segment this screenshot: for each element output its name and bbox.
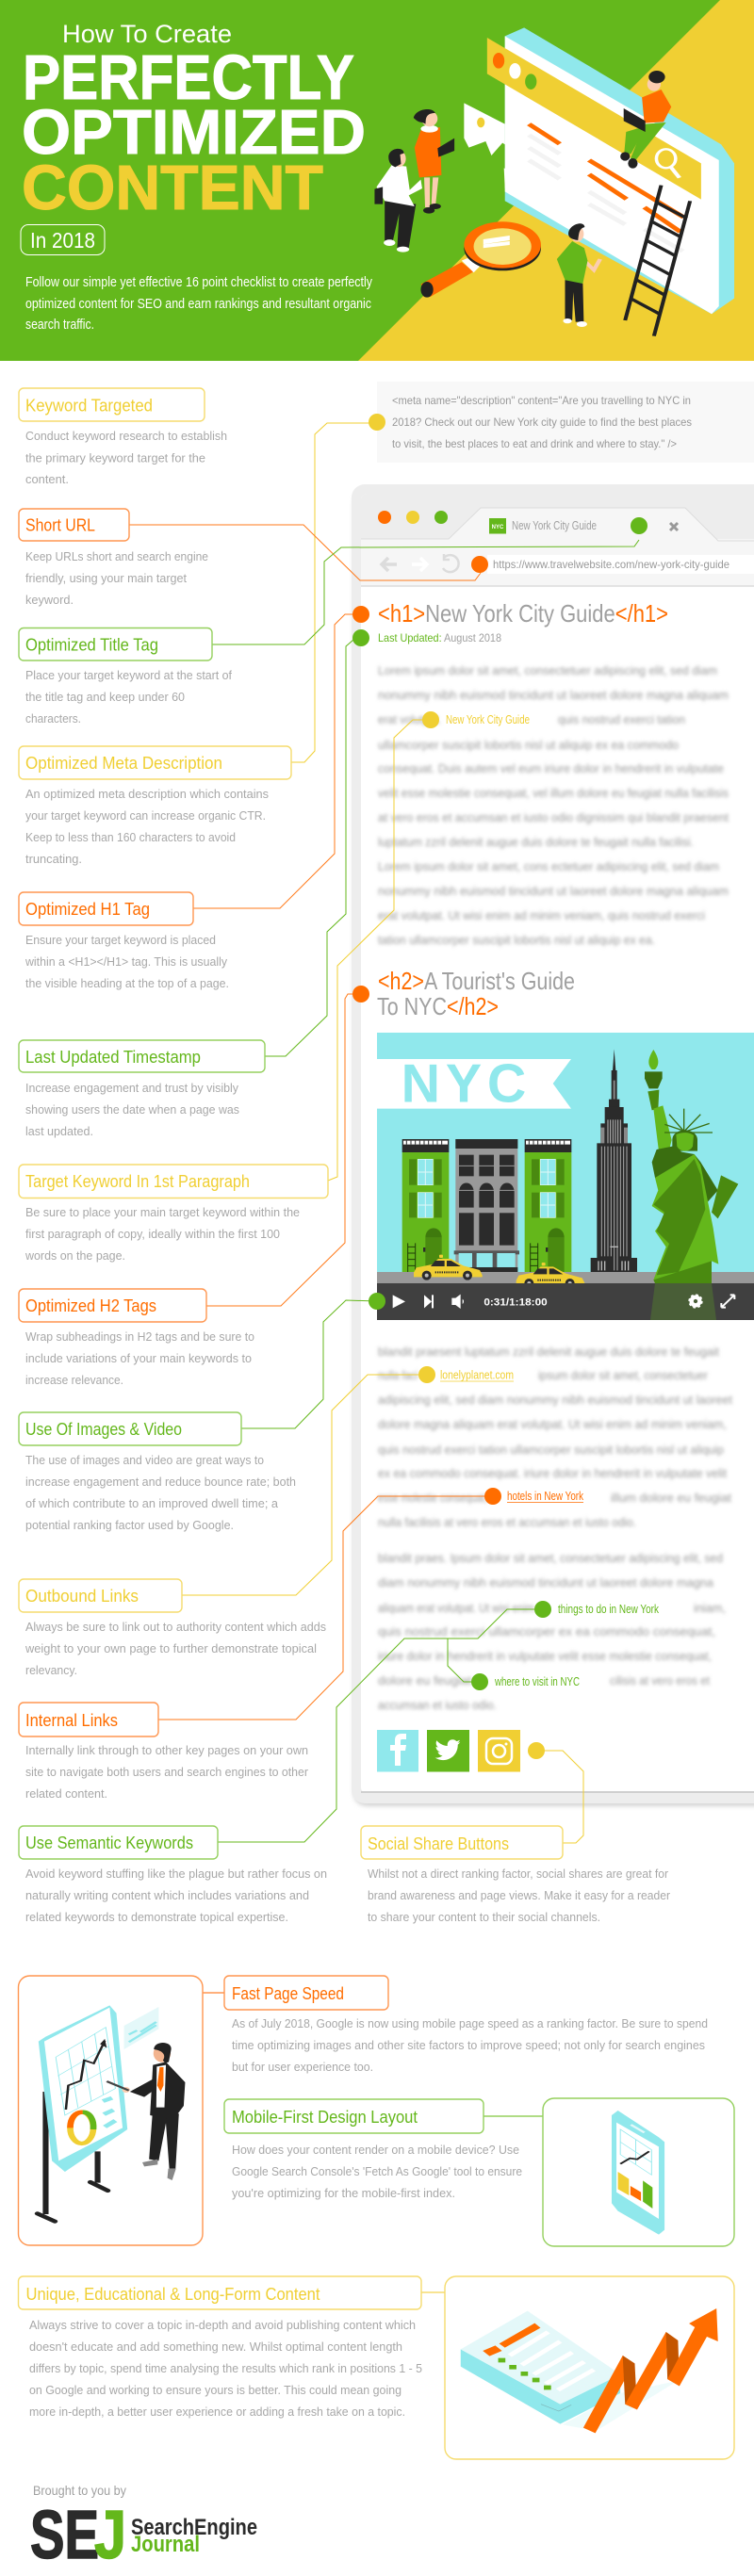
- blurred body paragraph 3: diam nonummy nibh euismod tincidunt ut laoreet dolore magna: [378, 1576, 713, 1590]
- item: Mobile-First Design Layout: Mobile-First Design Layout: [232, 2107, 418, 2127]
- intro paragraph: search traffic.: [25, 318, 94, 333]
- blurred body paragraph 2: adipiscing elit, sed diam nonummy nibh euismod tincidunt ut laoreet: [378, 1394, 733, 1407]
- item: Optimized Meta Description: your target keyword can increase organic CTR.: [25, 808, 266, 823]
- connector: first paragraph keyword: [328, 720, 431, 1181]
- logo: Search Engine Journal: Journal: [131, 2532, 200, 2557]
- blurred body paragraph 1: [378, 664, 729, 947]
- blurred body paragraph 1: erat volutpat.: [378, 713, 441, 726]
- item: Social Share Buttons: [361, 1826, 671, 1924]
- keyword link in first paragraph: New York City Guide: [446, 713, 530, 726]
- panel: page speed illustration: [19, 1976, 224, 2245]
- item: Optimized Title Tag: Place your target keyword at the start of: [25, 668, 232, 682]
- page H1: <h1>New York City Guide</h1>: [378, 599, 668, 628]
- video player: [377, 1033, 754, 1320]
- item: Internal Links: related content.: [25, 1786, 107, 1801]
- blurred body paragraph 1: erat volutpat. Ut wisi enim ad minim veniam, quis nostrud exerci: [378, 909, 705, 922]
- item: Use Of Images & Video: increase engagement and reduce bounce rate; both: [25, 1475, 296, 1489]
- blurred body paragraph 1: luptatum zzril delenit augue duis dolore te feugait nulla facilisi.: [378, 836, 694, 849]
- blurred body paragraph 3: dolore eu feugiat: [378, 1674, 472, 1687]
- icon: twitter: [427, 1730, 469, 1771]
- item: Optimized Meta Description: Keep to less than 160 characters to avoid: [25, 830, 236, 844]
- blurred body paragraph 2: illum dolore eu feugiat: [611, 1492, 732, 1505]
- item: Target Keyword In 1st Paragraph: [19, 1165, 328, 1263]
- presentation board: [38, 2005, 127, 2222]
- blurred body paragraph 1: velit esse molestie consequat, vel illum dolore eu feugiat nulla facilisis: [378, 787, 729, 800]
- blurred body paragraph 1: quis nostrud exerci tation: [558, 713, 685, 726]
- item: Target Keyword In 1st Paragraph: first paragraph of copy, ideally within the first 100: [25, 1227, 280, 1241]
- browser window: [464, 27, 734, 314]
- blurred body paragraph 2: quis nostrud exerci tation ullamcorper suscipit lobortis nisl ut aliquip: [378, 1443, 724, 1457]
- item: Fast Page Speed: but for user experience too.: [232, 2060, 373, 2074]
- person on top with laptop: [620, 71, 671, 169]
- document stack: [461, 2311, 678, 2431]
- page H2: [377, 967, 575, 1020]
- connector: H2 tags: [206, 994, 361, 1306]
- blurred body paragraph 3: aliquam erat volutpat. Ut wisi enim: [378, 1602, 534, 1615]
- taxi right: [516, 1263, 584, 1288]
- heading: How To Create: How To Create: [62, 20, 232, 48]
- panel: example meta description: 2018? Check out our New York city guide to find the best places: [392, 416, 692, 429]
- icon: facebook: [377, 1730, 418, 1771]
- item: Optimized Title Tag: Optimized Title Tag: [25, 635, 158, 654]
- header banner: [0, 0, 754, 361]
- last updated line: Last Updated: August 2018: [378, 631, 501, 644]
- video control bar: [377, 1283, 754, 1320]
- item: Optimized Meta Description: An optimized meta description which contains: [25, 787, 269, 801]
- blurred body paragraph 2: dolore magna aliquam erat volutpat. Ut wisi enim ad minim veniam,: [378, 1418, 727, 1431]
- item: Use Semantic Keywords: naturally writing content which includes variations and: [25, 1888, 309, 1902]
- tab favicon: [489, 518, 506, 533]
- NYC banner: NYC: [402, 1053, 526, 1114]
- tab favicon: NYC: [492, 525, 504, 530]
- page H2: <h2>A Tourist's Guide: [378, 967, 575, 995]
- item: Optimized Meta Description: truncating.: [25, 852, 82, 866]
- item: Optimized Meta Description: Optimized Meta Description: [25, 753, 222, 773]
- item: Social Share Buttons: Social Share Buttons: [368, 1834, 509, 1853]
- item: Mobile-First Design Layout: [224, 2099, 522, 2200]
- item: Use Of Images & Video: of which contribute to an improved dwell time; a: [25, 1496, 279, 1510]
- item: Keyword Targeted: Conduct keyword research to establish: [25, 429, 227, 443]
- item: Short URL: keyword.: [25, 593, 74, 607]
- grey building: [454, 1139, 519, 1272]
- item: Short URL: [19, 509, 208, 607]
- taxi left: [414, 1255, 483, 1280]
- NYC banner: [377, 1053, 571, 1114]
- item: Internal Links: [19, 1703, 309, 1801]
- item: Short URL: friendly, using your main target: [25, 571, 187, 585]
- item: Keyword Targeted: Keyword Targeted: [25, 396, 153, 415]
- intro paragraph: [25, 275, 373, 333]
- blurred body paragraph 1: nonummy nibh euismod tincidunt ut laoreet dolore magna aliquam: [378, 689, 729, 702]
- magnifying glass: [420, 221, 541, 298]
- item: Internal Links: site to navigate both users and search engines to other: [25, 1765, 309, 1779]
- item: Mobile-First Design Layout: you're optimizing for the mobile-first index.: [232, 2186, 455, 2200]
- heading: PERFECTLY: PERFECTLY: [23, 42, 354, 113]
- footer: Brought to you by: Brought to you by: [33, 2483, 126, 2498]
- item: Unique, Educational & Long-Form Content: Always strive to cover a topic in-depth and avoid publishing content which: [29, 2318, 416, 2332]
- internal link: hotels: hotels in New York: [507, 1490, 584, 1503]
- item: Optimized Meta Description: [19, 746, 291, 866]
- blurred body paragraph 3: [378, 1552, 726, 1712]
- road: [377, 1272, 754, 1283]
- item: Fast Page Speed: Fast Page Speed: [232, 1983, 344, 2003]
- item: Keyword Targeted: content.: [25, 472, 69, 486]
- item: Last Updated Timestamp: Increase engagement and trust by visibly: [25, 1081, 238, 1095]
- blurred body paragraph 1: nonummy nibh euismod tincidunt ut laoreet dolore magna aliquam: [378, 885, 729, 898]
- item: Use Of Images & Video: [19, 1412, 296, 1532]
- green townhouse right: [525, 1139, 571, 1272]
- blurred body paragraph 1: Lorem ipsum dolor sit amet, cons ectetuer adipiscing elit, sed diam: [378, 860, 719, 873]
- blurred body paragraph 3: quis nostrud exerci ullamcorper ex ea commodo consequat,: [378, 1625, 715, 1639]
- item: Target Keyword In 1st Paragraph: Be sure to place your main target keyword within the: [25, 1205, 300, 1219]
- item: Optimized H1 Tag: within a <H1></H1> tag. This is usually: [25, 954, 227, 969]
- blurred body paragraph 3: accumsan et iusto odio.: [378, 1699, 497, 1712]
- man with folder: [374, 149, 422, 253]
- item: Optimized Title Tag: the title tag and keep under 60: [25, 690, 185, 704]
- item: Outbound Links: Outbound Links: [25, 1586, 139, 1606]
- illustration: isometric browser with people: [374, 27, 734, 336]
- address bar: https://www.travelwebsite.com/new-york-city-guide: [493, 558, 729, 571]
- panel: example meta description: <meta name="description" content="Are you travelling to NYC in: [392, 394, 691, 407]
- item: Outbound Links: [19, 1579, 326, 1677]
- blurred body paragraph 1: Lorem ipsum dolor sit amet, consectetuer adipiscing elit, sed diam: [378, 664, 717, 677]
- logo: Search Engine Journal: [30, 2498, 257, 2573]
- ladder: [625, 186, 690, 336]
- blurred body paragraph 2: ipsum dolor sit amet, consectetuer: [538, 1369, 708, 1382]
- blurred body paragraph 1: ullamcorper suscipit lobortis nisl ut aliquip ex ea commodo: [378, 739, 679, 752]
- connector: images and video: [241, 1300, 377, 1428]
- item: Unique, Educational & Long-Form Content: differs by topic, spend time analysing the results which rank in positions 1 - 5: [29, 2361, 422, 2375]
- tab title: New York City Guide: [512, 519, 597, 532]
- page H2: To NYC</h2>: [377, 992, 499, 1020]
- item: Target Keyword In 1st Paragraph: Target Keyword In 1st Paragraph: [25, 1171, 250, 1191]
- Statue of Liberty: [645, 1050, 738, 1283]
- connector: short URL: [129, 525, 481, 580]
- address bar: [487, 555, 754, 574]
- logo: Search Engine Journal: SearchEngine: [131, 2515, 257, 2540]
- panel: example meta description: [377, 382, 754, 463]
- blurred body paragraph 3: blandit praes. Ipsum dolor sit amet, consectetuer adipiscing elit, sed: [378, 1552, 723, 1565]
- item: Use Semantic Keywords: [19, 1826, 327, 1924]
- item: Last Updated Timestamp: showing users the date when a page was: [25, 1102, 239, 1117]
- phone: [612, 2111, 664, 2235]
- green townhouse left: [402, 1139, 449, 1272]
- item: Use Of Images & Video: potential ranking factor used by Google.: [25, 1518, 234, 1532]
- semantic keyword: where to visit: where to visit in NYC: [494, 1675, 580, 1688]
- item: Use Semantic Keywords: Avoid keyword stuffing like the plague but rather focus on: [25, 1867, 327, 1881]
- item: Optimized Title Tag: characters.: [25, 711, 81, 726]
- blurred body paragraph 3: cilisis at vero eros et: [610, 1674, 710, 1687]
- badge: In 2018: In 2018: [30, 228, 95, 253]
- item: Outbound Links: weight to your own page to further demonstrate topical: [25, 1641, 317, 1655]
- small card: [124, 2007, 158, 2049]
- item: Last Updated Timestamp: [19, 1040, 265, 1138]
- rising arrow: [583, 2308, 718, 2433]
- item: Unique, Educational & Long-Form Content: on Google and working to ensure yours is better. This could mean going: [29, 2383, 402, 2397]
- semantic keyword: things to do: things to do in New York: [558, 1603, 660, 1616]
- item: Use Semantic Keywords: related keywords to demonstrate topical expertise.: [25, 1910, 288, 1924]
- panel: browser mockup: [352, 484, 754, 1806]
- item: Optimized H1 Tag: [19, 892, 229, 990]
- navigation icons: [382, 554, 459, 572]
- blurred body paragraph 1: tation ullamcorper suscipit lobortis nisl ut aliquip ex ea.: [378, 934, 655, 947]
- connector lines: [129, 423, 639, 1843]
- item: Mobile-First Design Layout: Google Search Console's 'Fetch As Google' tool to ensure: [232, 2164, 522, 2178]
- panel: mobile illustration: [484, 2098, 734, 2246]
- item: Fast Page Speed: As of July 2018, Google is now using mobile page speed as a ranking factor. Be sure to spend: [232, 2016, 708, 2030]
- item: Fast Page Speed: [224, 1976, 708, 2074]
- item: Internal Links: Internally link through to other key pages on your own: [25, 1743, 308, 1757]
- connector: meta description: [291, 423, 369, 762]
- blurred body paragraph 3: iniam,: [694, 1602, 726, 1615]
- tab close: [670, 523, 678, 530]
- woman with tablet: [414, 109, 454, 214]
- connector: last updated: [265, 638, 361, 1056]
- item: Last Updated Timestamp: last updated.: [25, 1124, 93, 1138]
- item: Unique, Educational & Long-Form Content: more in-depth, a better user experience or adding a fresh take on a topic.: [29, 2405, 405, 2419]
- connector: social share: [536, 1751, 583, 1843]
- heading: OPTIMIZED: OPTIMIZED: [22, 97, 366, 168]
- item: Unique, Educational & Long-Form Content: Unique, Educational & Long-Form Content: [26, 2284, 320, 2304]
- item: Social Share Buttons: Whilst not a direct ranking factor, social shares are great for: [368, 1867, 669, 1881]
- logo: Search Engine Journal: SE: [30, 2498, 99, 2573]
- item: Use Of Images & Video: Use Of Images & Video: [25, 1419, 182, 1439]
- blurred body paragraph 2: ex ea commodo consequat. iriure dolor in hendrerit in vulputate velit: [378, 1467, 728, 1480]
- item: Use Of Images & Video: The use of images and video are great ways to: [25, 1453, 264, 1467]
- blurred body paragraph 2: esse molestie consequat,: [378, 1492, 487, 1505]
- item: Optimized H2 Tags: include variations of your main keywords to: [25, 1351, 252, 1365]
- item: Optimized H1 Tag: Ensure your target keyword is placed: [25, 933, 216, 947]
- item: Keyword Targeted: the primary keyword target for the: [25, 450, 205, 465]
- person in green shirt: [557, 223, 600, 327]
- heading: CONTENT: CONTENT: [22, 153, 323, 223]
- item: Optimized H1 Tag: the visible heading at the top of a page.: [25, 976, 229, 990]
- item: Internal Links: Internal Links: [25, 1710, 118, 1730]
- connector: H1 tag: [193, 614, 361, 908]
- logo: Search Engine Journal: J: [94, 2498, 126, 2573]
- blurred body paragraph 1: consequat. Duis autem vel eum iriure dolor in hendrerit in vulputate: [378, 762, 724, 775]
- item: Social Share Buttons: to share your content to their social channels.: [368, 1910, 600, 1924]
- item: Target Keyword In 1st Paragraph: words on the page.: [25, 1248, 125, 1263]
- connector: internal links: [158, 1496, 493, 1720]
- blurred body paragraph 1: at vero eros et accumsan et iusto odio dignissim qui blandit praesent: [378, 811, 729, 824]
- item: Unique, Educational & Long-Form Content: doesn't educate and add something new. Whilst optimal content length: [29, 2340, 402, 2354]
- connector: title tag: [212, 540, 639, 644]
- item: Keyword Targeted: [19, 388, 227, 486]
- item: Mobile-First Design Layout: How does your content render on a mobile device? Use: [232, 2143, 519, 2157]
- item: Short URL: Short URL: [25, 514, 95, 535]
- browser tab bar: [361, 494, 754, 586]
- connector: semantic keywords branch: [448, 1639, 480, 1682]
- icon: instagram: [478, 1730, 520, 1771]
- item: Last Updated Timestamp: Last Updated Timestamp: [25, 1047, 201, 1067]
- item: Social Share Buttons: brand awareness and page views. Make it easy for a reader: [368, 1888, 671, 1902]
- presenter: [107, 2043, 185, 2180]
- connector: semantic keywords: [218, 1609, 543, 1842]
- blurred body paragraph 2: nulla faci: [378, 1369, 418, 1382]
- video control bar: 0:31/1:18:00: [484, 1296, 548, 1308]
- blurred body paragraph 2: nulla facilisis at vero eros et accumsan et iusto odio.: [378, 1516, 636, 1529]
- item: Optimized H2 Tags: increase relevance.: [25, 1373, 123, 1387]
- item: Unique, Educational & Long-Form Content: [19, 2276, 422, 2419]
- panel: long-form content illustration: [421, 2276, 734, 2459]
- item: Optimized H2 Tags: [19, 1289, 254, 1387]
- item: Short URL: Keep URLs short and search engine: [25, 549, 208, 563]
- blurred body paragraph 2: [378, 1345, 733, 1529]
- item: Optimized H2 Tags: Optimized H2 Tags: [25, 1296, 156, 1315]
- connector: outbound links: [182, 1375, 427, 1595]
- blurred body paragraph 3: iriure dolor in hendrerit in vulputate velit esse molestie consequat,: [378, 1650, 712, 1663]
- item: Optimized H2 Tags: Wrap subheadings in H2 tags and be sure to: [25, 1329, 254, 1344]
- item: Use Semantic Keywords: Use Semantic Keywords: [25, 1833, 193, 1852]
- blurred body paragraph 2: blandit praesent luptatum zzril delenit augue duis dolore te feugait: [378, 1345, 720, 1359]
- intro paragraph: Follow our simple yet effective 16 point checklist to create perfectly: [25, 275, 373, 290]
- outbound link text: lonelyplanet.com: [440, 1368, 514, 1381]
- panel: example meta description: to visit, the best places to eat and drink and where to stay." />: [392, 437, 677, 450]
- Empire State Building: [591, 1049, 637, 1272]
- item: Fast Page Speed: time optimizing images and other site factors to improve speed; not only for search engines: [232, 2038, 705, 2052]
- item: Outbound Links: Always be sure to link out to authority content which adds: [25, 1620, 326, 1634]
- marker dots: [352, 414, 647, 1759]
- item: Optimized H1 Tag: Optimized H1 Tag: [25, 899, 150, 919]
- item: Outbound Links: relevancy.: [25, 1663, 77, 1677]
- item: Optimized Title Tag: [19, 628, 232, 726]
- intro paragraph: optimized content for SEO and earn rankings and resultant organic: [25, 297, 371, 312]
